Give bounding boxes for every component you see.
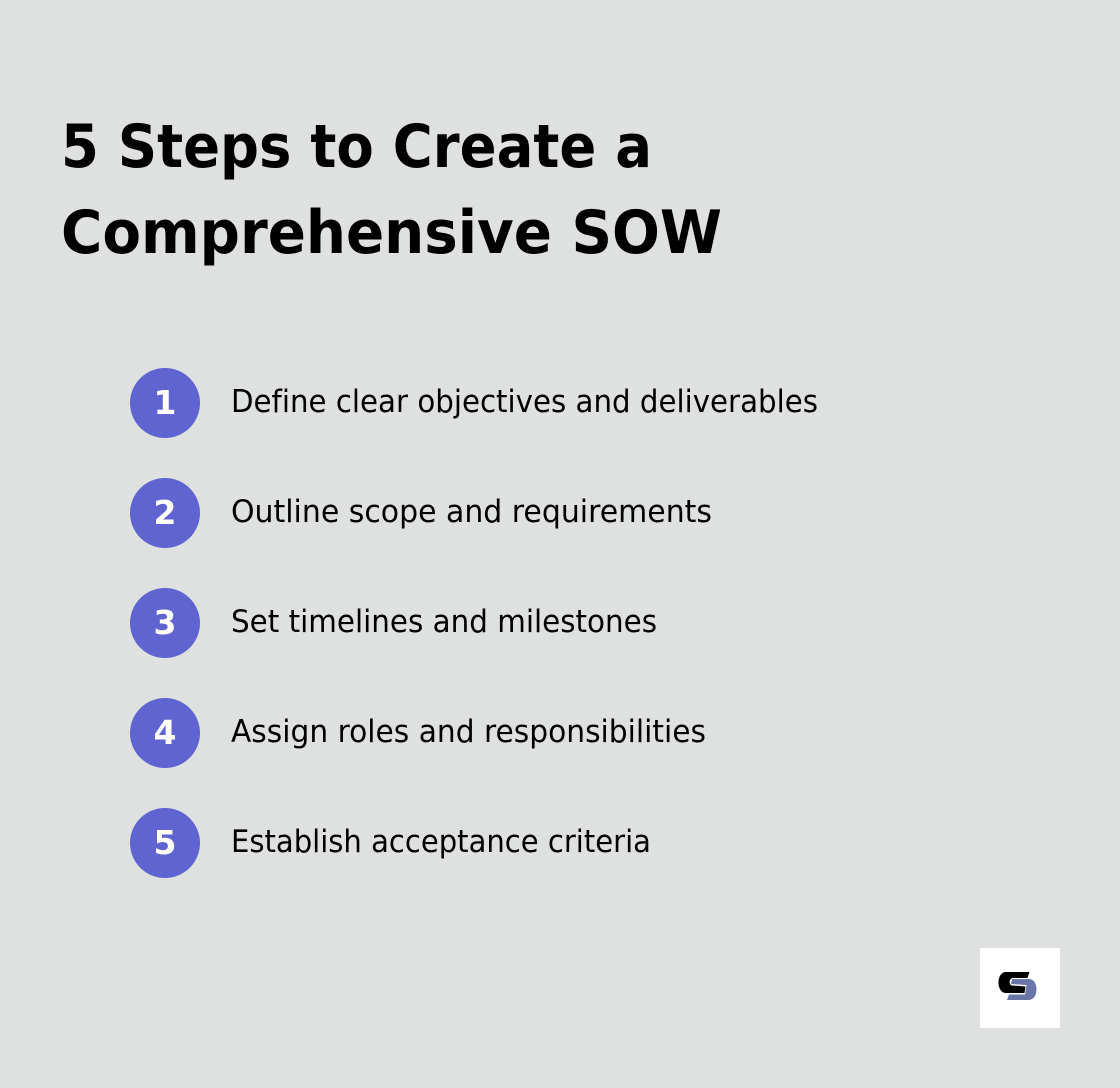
step 2: 2 [154,493,176,532]
title [61,112,722,268]
step 5: Establish acceptance criteria [231,824,651,860]
title: Comprehensive SOW [61,198,722,268]
step 1 [130,368,818,438]
step 4 [130,698,706,768]
title: 5 Steps to Create a [61,112,652,182]
step 3: Set timelines and milestones [231,604,657,640]
step 5 [130,808,651,878]
step 2: Outline scope and requirements [231,494,712,530]
step 1: Define clear objectives and deliverables [231,384,818,420]
step 3: 3 [154,603,176,642]
logo [980,948,1060,1028]
step 4: Assign roles and responsibilities [231,714,706,750]
step 2 [130,478,712,548]
step 5: 5 [154,823,176,862]
step 4: 4 [154,713,176,752]
step 1: 1 [154,383,176,422]
step 3 [130,588,657,658]
